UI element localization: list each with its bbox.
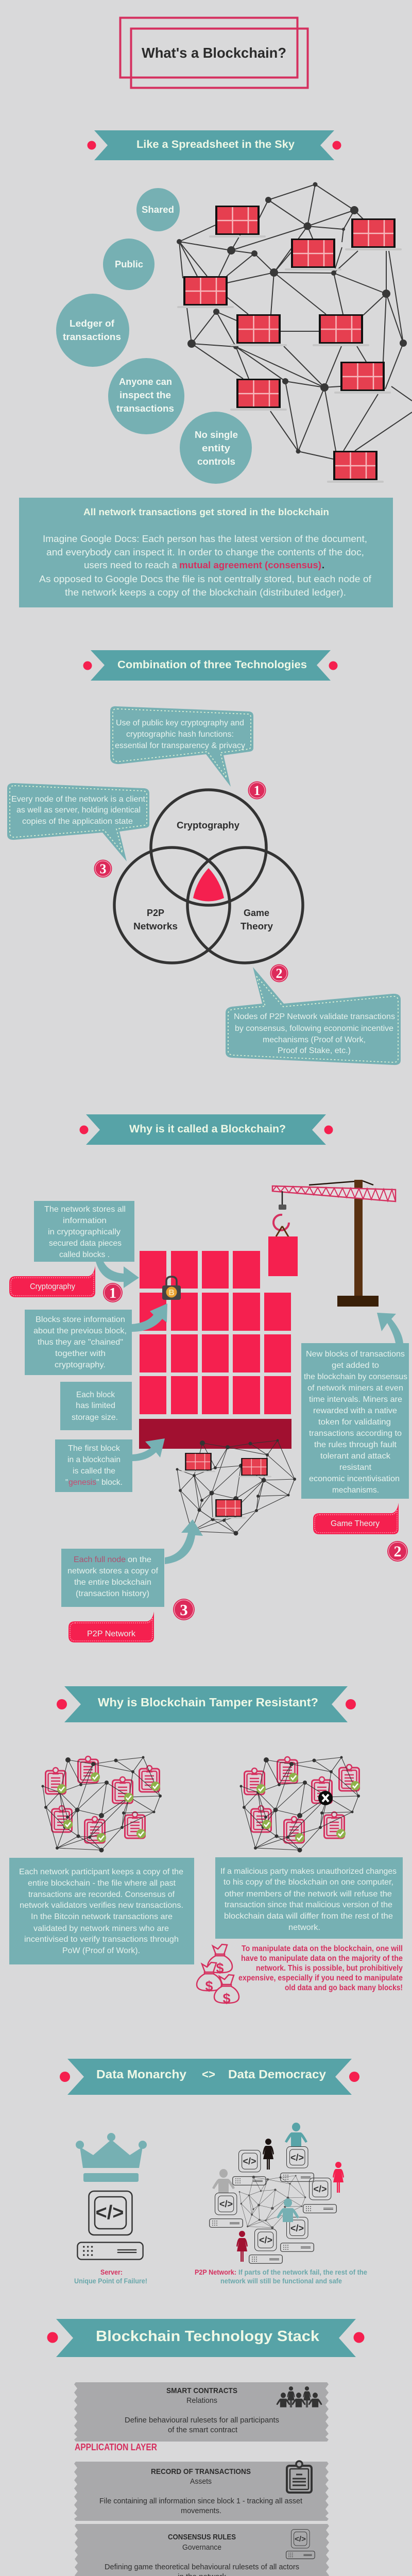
text box: network stores: in cryptographically [48,1228,121,1236]
panel: consensus rules: Governance [182,2543,221,2552]
arrow: to genesis block [132,1438,165,1461]
panel: all network transactions: Imagine Google Docs: Each person has the latest version of the document, [43,534,367,544]
panel: smart contracts: Relations [186,2396,217,2405]
banner: technology stack: Blockchain Technology Stack [96,2328,320,2345]
banner: combination of three technologies [83,650,338,681]
banner: data monarchy vs democracy [60,2059,359,2095]
text box: network stores [34,1201,134,1262]
text box: blocks store information: about the previous block, [33,1327,127,1335]
panel: malicious party: network. [288,1923,320,1932]
text box: network stores: called blocks . [59,1250,110,1259]
callout: cryptography: cryptographic hash functions: [126,730,234,739]
panel: copy of the blockchain: network validators verifies new transactions. [20,1901,183,1910]
icon: central server: </> [96,2202,124,2224]
icon: money bags: $ [216,1960,224,1976]
text box: genesis block: is called the [73,1467,115,1476]
panel: all network transactions [19,498,393,607]
badge: 2: 2 [393,1543,402,1560]
tag: p2p network [68,1612,154,1642]
panel: copy of the blockchain: Each network participant keeps a copy of the [19,1868,183,1876]
badge: 1: 1 [253,783,261,798]
label: application layer: APPLICATION LAYER [75,2442,157,2452]
bubble: public [103,239,154,290]
panel: malicious party: other members of the network will refuse the [225,1890,392,1899]
text box: genesis block: in a blockchain [67,1455,121,1464]
network with tampered document [240,1756,360,1853]
venn diagram: Game [244,908,269,918]
panel: all network transactions: As opposed to Google Docs the file is not centrally stored, but each node of [39,574,372,584]
text box: limited storage: storage size. [72,1413,118,1422]
panel: record of transactions [74,2461,329,2521]
panel: malicious party: If a malicious party makes unauthorized changes [220,1867,397,1876]
network of laptops [177,182,412,483]
servers: </> [219,2199,233,2209]
panel: smart contracts: of the smart contract [168,2426,238,2434]
text box: new blocks [301,1343,409,1499]
bubble: no single entity: controls [197,456,235,467]
caption: p2p network: P2P Network: [195,2268,236,2276]
servers: </> [290,2153,304,2163]
text box: limited storage [60,1382,132,1430]
panel: record of transactions: movements. [181,2506,221,2515]
panel: copy of the blockchain: In the Bitcoin network transactions are [31,1912,173,1921]
badge: 1 [103,1283,123,1302]
text box: genesis block: " [65,1478,68,1487]
banner: data monarchy vs democracy: Data Monarchy [96,2067,186,2081]
venn diagram [114,790,303,963]
icon: server: </> [295,2535,306,2544]
servers: </> [290,2223,304,2233]
text box: genesis block: genesis [68,1478,96,1487]
panel: malicious party [215,1857,403,1939]
text box: blocks store information: together with [55,1349,106,1358]
panel: copy of the blockchain: PoW (Proof of Work). [62,1946,140,1955]
panel: copy of the blockchain: transactions are recorded. Consensus of [28,1890,175,1899]
servers [210,2146,336,2263]
icon: clipboard [287,2461,312,2493]
caption: server: Server: [100,2268,123,2276]
arrow: to network [165,1519,203,1564]
banner: tamper resistant: Why is Blockchain Tamper Resistant? [98,1696,318,1709]
venn diagram: Networks [133,921,178,931]
icon: money bags: $ [205,1978,213,1994]
icon: family [276,2386,322,2408]
badge: 2 [270,964,288,982]
banner: tamper resistant [57,1686,356,1722]
text box: new blocks: mechanisms. [332,1486,379,1495]
panel: record of transactions: Assets [190,2477,212,2486]
callout: game theory [226,967,401,1065]
banner: technology stack [47,2319,365,2357]
badge: 2: 2 [276,966,282,981]
text box: network stores: secured data pieces [49,1239,122,1248]
panel: all network transactions: mutual agreement (consensus) [179,560,321,570]
panel: copy of the blockchain [9,1858,194,1964]
arrow: to crane [377,1313,403,1343]
text: cost of manipulation [238,1944,403,1992]
text box: blocks store information [25,1310,132,1375]
panel: consensus rules: CONSENSUS RULES [168,2533,236,2541]
tag: cryptography [9,1266,95,1297]
callout: p2p: copies of the application state [22,817,133,826]
icon: money bags: $ [222,1991,231,2006]
callout: cryptography: Use of public key cryptography and [116,719,244,727]
bubble: ledger [56,294,129,367]
text box: new blocks: resistant [339,1463,372,1472]
badge: 3: 3 [180,1601,188,1619]
crane [268,1180,396,1307]
network under blockchain [176,1439,296,1535]
panel: malicious party: transaction since that malicious version of the [225,1901,392,1909]
panel: smart contracts: Define behavioural rulesets for all participants [125,2416,279,2425]
callout: game theory: Nodes of P2P Network validate transactions [234,1012,395,1021]
network of validated documents [41,1756,162,1853]
text box: new blocks: time intervals. Miners are [309,1395,402,1404]
panel: all network transactions: . [322,560,324,570]
banner: why is it called a blockchain: Why is it called a Blockchain? [129,1123,286,1135]
banner: data monarchy vs democracy: Data Democracy [228,2067,326,2081]
title [121,18,308,88]
text box: new blocks: the rules through fault [314,1440,397,1449]
panel: smart contracts: SMART CONTRACTS [166,2386,237,2395]
text box: each full node: the entire blockchain [74,1578,151,1587]
text box: genesis block: " block. [96,1478,123,1487]
text box: new blocks: New blocks of transactions [306,1350,405,1359]
title: What's a Blockchain? [142,45,286,61]
text box: network stores: The network stores all [44,1205,126,1214]
panel: all network transactions: the network keeps a copy of the blockchain (distributed ledger). [65,587,346,598]
bubble: shared [136,188,180,231]
tag: p2p network: P2P Network [87,1630,136,1638]
panel: smart contracts [74,2382,329,2442]
callout: game theory: Proof of Stake, etc.) [278,1046,351,1055]
callout: p2p [7,783,149,861]
text box: new blocks: get added to [332,1361,379,1370]
panel: all network transactions: and everybody can inspect it. In order to change the contents of the doc, [46,547,364,557]
callout: game theory: mechanisms (Proof of Work, [263,1036,366,1044]
venn diagram: Cryptography [177,820,239,831]
panel: record of transactions: RECORD OF TRANSACTIONS [151,2467,251,2476]
bubble: no single entity [180,412,252,484]
text box: new blocks: of network miners at even [307,1384,403,1393]
peer to peer network [210,2123,344,2263]
venn diagram: Theory [241,921,273,931]
panel: malicious party: to his copy of the blockchain on one computer, [224,1878,393,1887]
caption: server: Unique Point of Failure! [74,2277,147,2285]
callout: cryptography: essential for transparency & privacy [115,741,245,750]
panel: malicious party: blockchain data will differ from the rest of the [224,1912,393,1921]
icon: crown [76,2133,147,2182]
text box: new blocks: economic incentivisation [309,1475,400,1483]
servers: </> [313,2184,327,2194]
banner: like a spreadsheet in the sky: Like a Spreadsheet in the Sky [136,139,295,150]
text box: genesis block: The first block [68,1444,121,1453]
text box: limited storage: Each block [76,1391,115,1399]
text box: limited storage: has limited [76,1401,115,1410]
text box: each full node: (transaction history) [76,1589,149,1598]
text box: genesis block [55,1439,132,1492]
bubble: anyone can inspect: transactions [116,403,174,414]
text box: new blocks: the blockchain by consensus [304,1372,407,1381]
icon: central server [77,2191,143,2260]
bubble: anyone can inspect [108,358,184,434]
caption: p2p network: network will still be functional and safe [220,2277,342,2285]
callout: game theory: by consensus, following economic incentive [235,1024,393,1033]
text box: blocks store information: thus they are "chained" [38,1338,123,1347]
banner: combination of three technologies: Combination of three Technologies [117,659,307,671]
text box: each full node: network stores a copy of [67,1567,159,1575]
property bubbles [56,188,252,484]
bubble: public: Public [115,259,143,269]
block grid [139,1251,291,1449]
text box: new blocks: token for validating [318,1418,391,1427]
panel: consensus rules [75,2524,329,2576]
badge: 2 [387,1541,408,1562]
arrow: to block [96,1262,139,1288]
banner: data monarchy vs democracy: <> [202,2067,215,2081]
banner: why is it called a blockchain [79,1114,333,1145]
tag: cryptography: Cryptography [30,1282,75,1291]
people [212,2123,344,2262]
text box: each full node [61,1549,164,1607]
bubble: anyone can inspect: Anyone can [119,377,172,387]
servers: </> [243,2156,256,2166]
text box: new blocks: tolerant and attack [320,1452,391,1461]
badge: 3: 3 [100,861,106,876]
badge: 3 [94,859,112,878]
panel: copy of the blockchain: entire blockchain - the file where all past [28,1879,176,1888]
tag: game theory [313,1503,399,1534]
text box: new blocks: rewarded with a native [313,1406,397,1415]
badge: 1 [248,781,266,800]
panel: copy of the blockchain: validated by network miners who are [33,1924,169,1933]
text box: each full node: Each full node [74,1555,126,1564]
panel: copy of the blockchain: incentivised to verify transactions through [24,1935,179,1944]
badge: 1: 1 [109,1285,116,1301]
text box: network stores: information [63,1216,107,1225]
callout: cryptography [110,706,253,787]
bubble: ledger: Ledger of [70,318,115,329]
badge: 3 [173,1599,195,1620]
caption: p2p network: If parts of the network fail, the rest of the [238,2268,367,2276]
panel: all network transactions: All network transactions get stored in the blockchain [83,507,329,517]
text box: new blocks: transactions according to [309,1429,402,1438]
bubble: anyone can inspect: inspect the [119,390,171,400]
bubble: no single entity: No single [195,430,238,440]
bubble: shared: Shared [142,205,174,215]
panel: record of transactions: File containing all information since block 1 - tracking all asset [99,2497,303,2505]
panel: all network transactions: users need to reach a [84,560,178,570]
icon: server [286,2529,315,2559]
servers: </> [259,2235,272,2245]
caption: server [74,2268,147,2285]
icon: padlock [162,1277,181,1300]
venn diagram: P2P [147,908,164,918]
banner: like a spreadsheet in the sky [88,130,341,160]
text box: blocks store information: cryptography. [55,1361,106,1369]
tag: game theory: Game Theory [331,1519,380,1528]
bubble: ledger: transactions [63,332,121,342]
bubble: no single entity: entity [202,443,230,453]
arrow: to lock [132,1303,167,1332]
callout: p2p: Every node of the network is a client [11,795,146,804]
callout: p2p: as well as server, holding identical [16,806,141,815]
text box: blocks store information: Blocks store information [36,1315,125,1324]
caption: p2p network [195,2268,367,2285]
icon: money bags [197,1944,239,2006]
icon: padlock: B [168,1289,175,1297]
panel: consensus rules: Defining game theoretical behavioural rulesets of all actors [105,2563,299,2571]
text box: each full node: on the [128,1555,151,1564]
